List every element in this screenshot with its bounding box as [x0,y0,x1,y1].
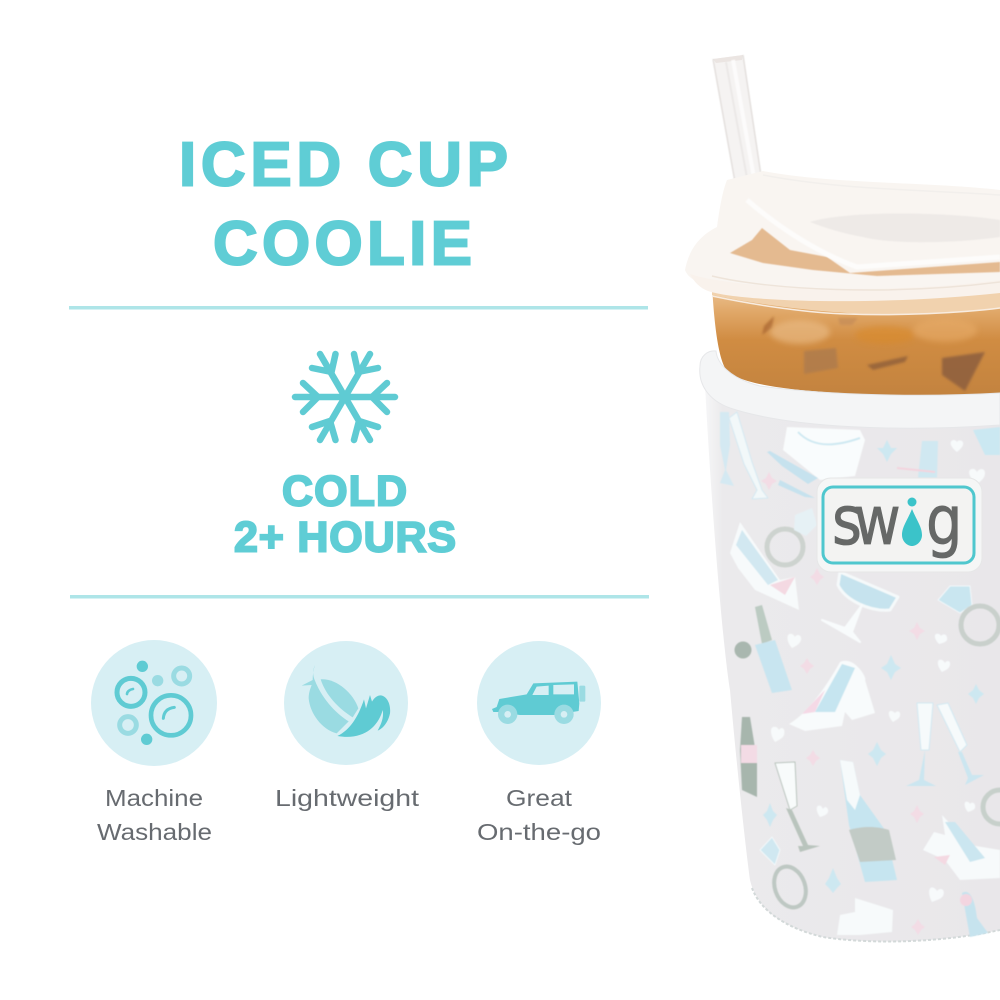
lid rim [690,274,1000,301]
product photo: cup with coolie [685,55,1000,941]
boot [837,898,893,935]
shoe [730,522,799,610]
feature: lightweight [275,641,420,811]
icon: feather [284,641,408,765]
pink sparkles [761,472,925,935]
cold 2+ hours [234,468,456,562]
feature: machine washable [91,640,217,845]
coolie sleeve [700,351,1000,941]
cold 2+ hours: COLD [282,468,407,516]
blue square [973,427,1000,455]
ring [767,529,803,565]
coffee seen through lid wall [712,285,1000,314]
iced coffee [712,285,1000,395]
feature: great on-the-go [477,641,601,845]
icon: teal drop [902,498,922,546]
straw [713,55,762,182]
lid ridge [747,200,1000,267]
logo patch [817,478,982,572]
pattern: wedding icons [720,412,1000,937]
label: Great [506,785,573,811]
flute gray [775,762,797,810]
champagne bottle [740,717,757,797]
icon: snowflake [295,354,395,440]
bottom ring [769,862,811,912]
brand wordmark: swig [832,481,962,560]
bottle center [840,760,897,882]
title: COOLIE [213,210,472,278]
top flutes [720,412,734,486]
label [97,785,212,845]
coffee seen through lid [730,228,1000,276]
icon: jeep [477,641,601,765]
icon: bubbles [91,640,217,766]
title: ICED CUP [179,130,508,200]
label: Washable [97,819,212,845]
title [179,130,508,278]
two flutes [917,703,933,750]
small lipstick [962,892,988,937]
lipstick and lips [755,605,772,644]
label [477,785,601,845]
small bottle [918,441,938,478]
label: On-the-go [477,819,601,845]
cake [783,427,865,480]
right ring 2 [983,790,1000,824]
cold 2+ hours: 2+ HOURS [234,514,456,562]
bottom shoe [923,815,1000,880]
sparkles [763,440,984,893]
collar [700,351,1000,428]
lid opening [810,214,1000,242]
label: Machine [105,785,203,811]
right ring [938,586,972,613]
heel [789,661,875,731]
coupe [838,572,898,610]
lid [685,171,1000,301]
hearts [771,440,985,902]
label: Lightweight [275,785,420,811]
